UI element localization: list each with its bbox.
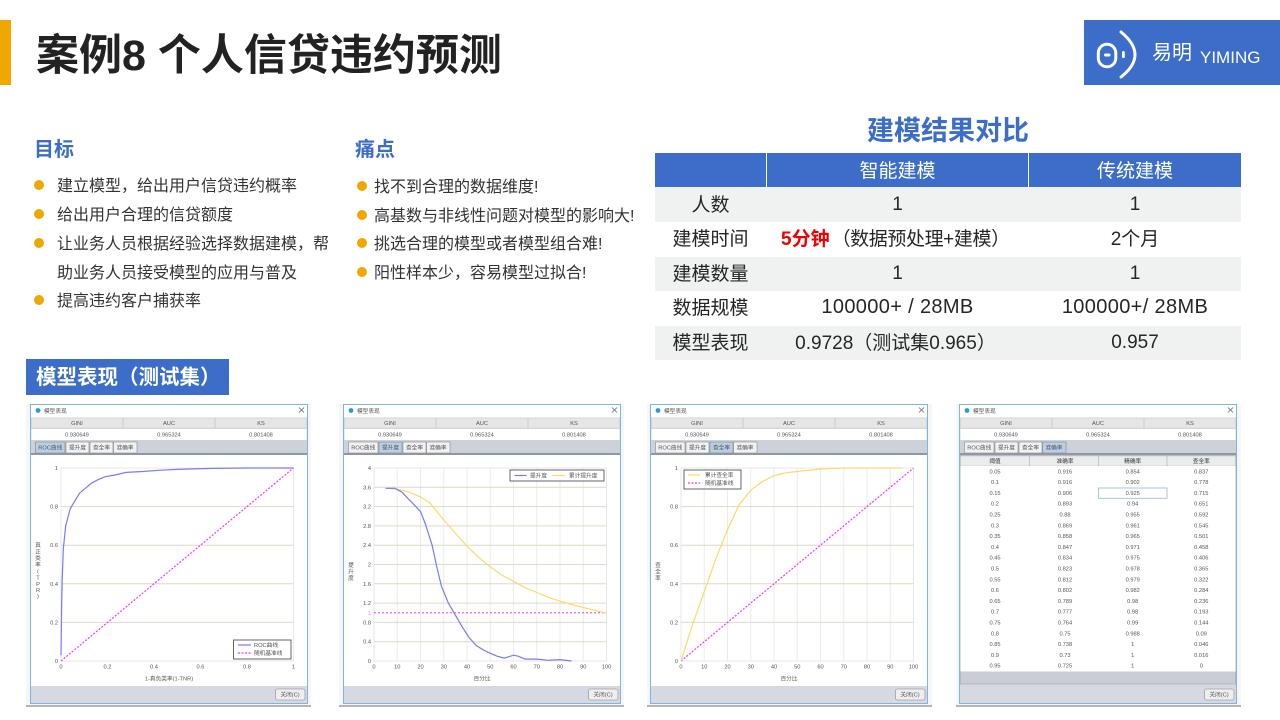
table window: threshold metrics: 0.5 bbox=[991, 566, 999, 572]
table window: threshold metrics: 0 bbox=[1200, 664, 1203, 670]
chart window: recall curve: 30 bbox=[748, 664, 754, 670]
chart window: lift curve: 4 bbox=[368, 466, 371, 472]
table window: threshold metrics: 0.906 bbox=[1058, 491, 1072, 497]
table window: threshold metrics: 0.501 bbox=[1194, 534, 1209, 540]
chart window: lift curve: 60 bbox=[510, 664, 516, 670]
table window: threshold metrics: 0.965324 bbox=[1086, 432, 1110, 438]
row: 建模时间: 2个月 bbox=[1111, 229, 1159, 250]
table window: threshold metrics: 0.802 bbox=[1058, 588, 1072, 594]
table window: threshold metrics: GINI bbox=[1000, 421, 1013, 427]
row: 数据规模: 100000+ / 28MB bbox=[821, 296, 974, 318]
table window: threshold metrics: 0.925 bbox=[1126, 491, 1140, 497]
chart window: recall curve: 0.965324 bbox=[777, 432, 801, 438]
section label: 模型表现（测试集）: 模型表现（测试集） bbox=[36, 366, 220, 389]
bullet 2: 高基数与非线性问题对模型的影响大! bbox=[374, 208, 634, 225]
table window: threshold metrics: 1 bbox=[1131, 653, 1135, 659]
table window: threshold metrics: 0.812 bbox=[1058, 577, 1072, 583]
chart window: lift curve: 0 bbox=[372, 664, 375, 670]
table window: threshold metrics: 关闭(C) bbox=[1210, 690, 1229, 698]
table window: threshold metrics: 0.823 bbox=[1058, 566, 1072, 572]
chart window: ROC curve: ( bbox=[37, 569, 39, 575]
chart window: ROC curve: 1-真负类率(1-TNR) bbox=[144, 674, 193, 682]
row: 数据规模: 100000+/ 28MB bbox=[1062, 296, 1208, 318]
row: 人数: 人数 bbox=[691, 195, 730, 216]
chart window: recall curve: 全 bbox=[655, 568, 661, 576]
row: 数据规模 bbox=[672, 296, 1208, 319]
chart window: lift curve: 0.965324 bbox=[470, 432, 494, 438]
bullet 1: 建立模型，给出用户信贷违约概率 bbox=[57, 178, 297, 195]
panel: 目标 bbox=[34, 138, 329, 310]
chart window: recall curve: 50 bbox=[794, 664, 801, 670]
row: 人数: 1 bbox=[892, 194, 903, 214]
table window: threshold metrics: 0.854 bbox=[1126, 469, 1140, 475]
row: 模型表现: 0.9728（测试集0.965） bbox=[795, 332, 996, 354]
chart window: ROC curve: 0.4 bbox=[150, 664, 157, 670]
table window: threshold metrics: 0.916 bbox=[1058, 480, 1072, 486]
chart window: ROC curve: 0.6 bbox=[50, 543, 58, 549]
table window: threshold metrics: 0.09 bbox=[1196, 631, 1207, 637]
table window: threshold metrics: 0.193 bbox=[1194, 610, 1209, 616]
table window: threshold metrics: 0.94 bbox=[1127, 502, 1139, 508]
comparison table bbox=[655, 153, 1241, 360]
table window: threshold metrics: 0.45 bbox=[990, 556, 1001, 562]
chart window: recall curve: 百分比 bbox=[781, 674, 798, 682]
chart window: recall curve: 随机基准线 bbox=[705, 479, 734, 487]
chart window: ROC curve: 0.2 bbox=[50, 620, 58, 626]
table window: threshold metrics: 0.55 bbox=[990, 577, 1001, 583]
chart window: recall curve: 20 bbox=[725, 664, 731, 670]
chart window: ROC curve: T bbox=[36, 576, 40, 582]
row: 数据规模: 数据规模 bbox=[672, 298, 748, 319]
chart window: ROC curve: 关闭(C) bbox=[280, 690, 299, 698]
row: 建模数量: 1 bbox=[1130, 263, 1140, 284]
chart window: ROC curve: 准确率 bbox=[116, 444, 133, 452]
chart window: lift curve: 2.4 bbox=[363, 543, 371, 549]
table window: threshold metrics: 0.35 bbox=[990, 534, 1001, 540]
chart window: ROC curve: KS bbox=[257, 421, 264, 427]
accent bar bbox=[0, 20, 11, 85]
chart window: ROC curve: ROC曲线 bbox=[254, 641, 278, 649]
chart window: lift curve: 模型表现 bbox=[357, 407, 380, 415]
chart window: ROC curve: 0.965324 bbox=[157, 432, 180, 438]
chart window: lift curve: 70 bbox=[533, 664, 540, 670]
logo: YIMING: YIMING bbox=[1200, 48, 1260, 67]
chart window: recall curve: 0.8 bbox=[670, 505, 678, 511]
chart window: lift curve: KS bbox=[570, 421, 578, 427]
table window: threshold metrics: 提升度 bbox=[998, 444, 1016, 452]
screenshot backing 2 bbox=[339, 404, 624, 707]
table window: threshold metrics: 0.592 bbox=[1194, 512, 1209, 518]
table header: 传统建模 bbox=[1097, 160, 1173, 182]
table window: threshold metrics: 0.1 bbox=[991, 480, 999, 486]
table window: threshold metrics: 0.738 bbox=[1058, 642, 1072, 648]
table window: threshold metrics: 阈值 bbox=[990, 457, 1001, 465]
chart window: ROC curve: 1 bbox=[291, 664, 295, 670]
table window: threshold metrics: 0.725 bbox=[1058, 664, 1072, 670]
row: 建模时间: 建模时间 bbox=[672, 229, 748, 250]
table window: threshold metrics: 查全率 bbox=[1193, 457, 1210, 465]
heading: 痛点: 痛点 bbox=[355, 139, 395, 161]
table window: threshold metrics: KS bbox=[1186, 421, 1194, 427]
chart window: ROC curve: 0.2 bbox=[103, 664, 111, 670]
chart window: recall curve: 0.2 bbox=[670, 620, 678, 626]
chart window: recall curve: KS bbox=[878, 421, 885, 427]
chart window: ROC curve: R bbox=[35, 588, 40, 594]
chart window: recall curve: AUC bbox=[783, 421, 795, 427]
table window: threshold metrics: 0.2 bbox=[991, 502, 999, 508]
chart window: lift curve: 1 bbox=[368, 611, 371, 617]
row: 人数 bbox=[655, 187, 1241, 222]
title: 案例8 个人信贷违约预测 bbox=[36, 32, 502, 80]
table window: threshold metrics: 0.236 bbox=[1194, 599, 1209, 605]
table window: threshold metrics: 准确率 bbox=[1057, 457, 1074, 465]
table window: threshold metrics: 0.715 bbox=[1194, 491, 1209, 497]
chart window: ROC curve: 0.801408 bbox=[249, 432, 272, 438]
chart window: lift curve: 百分比 bbox=[473, 674, 491, 682]
table window: threshold metrics: AUC bbox=[1092, 421, 1104, 427]
chart window: ROC curve: ) bbox=[37, 594, 39, 600]
chart window: ROC curve: 0.8 bbox=[50, 505, 58, 511]
table window: threshold metrics: ROC曲线 bbox=[968, 444, 992, 452]
chart window: ROC curve: 1 bbox=[54, 466, 58, 472]
table window: threshold metrics: 0.902 bbox=[1126, 480, 1140, 486]
table window: threshold metrics: 0.978 bbox=[1126, 566, 1140, 572]
chart window: recall curve bbox=[650, 404, 928, 704]
screenshot backing 1 bbox=[26, 404, 311, 707]
bullet 3 bbox=[34, 235, 329, 282]
table window: threshold metrics: 0.971 bbox=[1126, 545, 1140, 551]
table window: threshold metrics: 0.73 bbox=[1060, 653, 1071, 659]
table window: threshold metrics: 0.85 bbox=[990, 642, 1001, 648]
chart window: recall curve: 提升度 bbox=[689, 444, 707, 452]
table window: threshold metrics: 0.789 bbox=[1058, 599, 1072, 605]
chart window: recall curve: 0 bbox=[675, 659, 678, 665]
table window: threshold metrics: 0.6 bbox=[991, 588, 999, 594]
chart window: ROC curve: 0.930649 bbox=[65, 432, 88, 438]
row: 建模时间: （数据预处理+建模） bbox=[832, 229, 1010, 250]
chart window: ROC curve: 模型表现 bbox=[44, 407, 67, 415]
chart window: ROC curve: 0.6 bbox=[196, 664, 204, 670]
bullet 4: 阳性样本少，容易模型过拟合! bbox=[374, 265, 586, 282]
chart window: lift curve: 0.8 bbox=[363, 620, 371, 626]
table window: threshold metrics: 0.869 bbox=[1058, 523, 1072, 529]
table window: threshold metrics: 0.95 bbox=[990, 664, 1001, 670]
table window: threshold metrics: 0.930649 bbox=[994, 432, 1018, 438]
table window: threshold metrics: 0.75 bbox=[990, 620, 1001, 626]
chart window: recall curve: 模型表现 bbox=[664, 407, 687, 415]
table window: threshold metrics: 0.979 bbox=[1126, 577, 1140, 583]
table window: threshold metrics: 0.25 bbox=[990, 512, 1001, 518]
table window: threshold metrics: 0.284 bbox=[1194, 588, 1209, 594]
table window: threshold metrics: 1 bbox=[1131, 664, 1135, 670]
table window: threshold metrics: 模型表现 bbox=[973, 407, 996, 415]
row: 模型表现: 模型表现 bbox=[672, 332, 748, 354]
chart window: ROC curve: 查全率 bbox=[92, 444, 110, 452]
table window: threshold metrics: 0.322 bbox=[1194, 577, 1209, 583]
chart window: recall curve: 10 bbox=[701, 664, 708, 670]
chart window: recall curve: 查 bbox=[655, 561, 661, 569]
chart window: ROC curve: 率 bbox=[35, 560, 41, 568]
chart window: recall curve: 0 bbox=[680, 664, 683, 670]
table header: 智能建模 bbox=[859, 160, 936, 182]
bullet 3: 助业务人员接受模型的应用与普及 bbox=[57, 265, 297, 282]
chart window: recall curve: 0.4 bbox=[670, 582, 678, 588]
table window: threshold metrics: 0.801408 bbox=[1178, 432, 1202, 438]
section label: 模型表现（测试集） bbox=[26, 359, 229, 395]
chart window: lift curve: 30 bbox=[440, 664, 447, 670]
table window: threshold metrics: 0.99 bbox=[1127, 620, 1139, 626]
chart window: lift curve: 3.2 bbox=[363, 505, 371, 511]
chart window: lift curve: 1.2 bbox=[363, 601, 371, 607]
chart window: lift curve: 查全率 bbox=[406, 444, 423, 452]
chart window: lift curve: 40 bbox=[464, 664, 470, 670]
chart window: recall curve: 40 bbox=[771, 664, 777, 670]
table window: threshold metrics: 0.98 bbox=[1127, 599, 1139, 605]
bullet 3: 让业务人员根据经验选择数据建模，帮 bbox=[57, 236, 329, 253]
chart window: lift curve: 100 bbox=[601, 664, 611, 670]
table window: threshold metrics: 0.15 bbox=[990, 491, 1001, 497]
chart window: lift curve: 关闭(C) bbox=[593, 690, 612, 698]
table window: threshold metrics: 0.858 bbox=[1058, 534, 1072, 540]
table window: threshold metrics: 0.778 bbox=[1194, 480, 1209, 486]
table window: threshold metrics: 0.365 bbox=[1194, 566, 1209, 572]
table window: threshold metrics: 准确率 bbox=[1046, 444, 1063, 452]
chart window: recall curve: 率 bbox=[655, 574, 661, 582]
chart window: lift curve: 3.6 bbox=[363, 485, 371, 491]
chart window: recall curve: 60 bbox=[818, 664, 824, 670]
table window: threshold metrics: 精确率 bbox=[1124, 457, 1142, 465]
table window: threshold metrics: 0.955 bbox=[1126, 512, 1140, 518]
table window: threshold metrics: 0.764 bbox=[1058, 620, 1072, 626]
chart window: ROC curve: 0.8 bbox=[243, 664, 250, 670]
row: 模型表现: 0.957 bbox=[1111, 332, 1159, 353]
table window: threshold metrics: 0.834 bbox=[1058, 556, 1072, 562]
row: 建模时间: 5分钟 bbox=[781, 229, 830, 250]
chart window: ROC curve: 0 bbox=[59, 664, 62, 670]
panel: 痛点 bbox=[355, 138, 634, 282]
chart window: ROC curve: AUC bbox=[162, 421, 175, 427]
chart window: lift curve: 度 bbox=[348, 574, 354, 582]
chart window: recall curve: 0.930649 bbox=[685, 432, 709, 438]
table window: threshold metrics: 0.458 bbox=[1194, 545, 1209, 551]
chart window: ROC curve: 0 bbox=[54, 659, 58, 665]
table window: threshold metrics: 0.893 bbox=[1058, 502, 1072, 508]
chart window: lift curve: 0.930649 bbox=[378, 432, 402, 438]
chart window: recall curve: 100 bbox=[909, 664, 919, 670]
chart window: lift curve: 90 bbox=[580, 664, 586, 670]
chart window: ROC curve: 0.4 bbox=[50, 582, 58, 588]
chart window: lift curve: 10 bbox=[394, 664, 400, 670]
table window: threshold metrics: 0.8 bbox=[991, 631, 999, 637]
chart window: ROC curve: 提升度 bbox=[68, 444, 86, 452]
logo: YIMING: 易明 bbox=[1152, 42, 1192, 64]
chart window: lift curve: 20 bbox=[417, 664, 423, 670]
heading: 建模结果对比: 建模结果对比 bbox=[867, 116, 1029, 146]
table window: threshold metrics: 0.961 bbox=[1126, 523, 1140, 529]
chart window: lift curve: 提升度 bbox=[530, 472, 547, 480]
table window: threshold metrics: 0.916 bbox=[1058, 469, 1072, 475]
chart window: recall curve: 准确率 bbox=[737, 444, 754, 452]
logo: YIMING bbox=[1084, 20, 1280, 85]
bullet 2: 给出用户合理的信贷额度 bbox=[57, 207, 233, 224]
table window: threshold metrics: 0.975 bbox=[1126, 556, 1140, 562]
row: 建模数量: 1 bbox=[892, 263, 903, 284]
chart window: recall curve: 关闭(C) bbox=[901, 690, 920, 698]
chart window: ROC curve: GINI bbox=[71, 421, 83, 427]
chart window: ROC curve: 真 bbox=[35, 541, 41, 549]
table window: threshold metrics: 0.98 bbox=[1127, 610, 1139, 616]
table window: threshold metrics: 查全率 bbox=[1022, 444, 1040, 452]
chart window: lift curve: 升 bbox=[348, 568, 354, 576]
row: 建模时间 bbox=[672, 228, 1159, 250]
table window: threshold metrics: 0.016 bbox=[1194, 653, 1209, 659]
chart window: recall curve: GINI bbox=[691, 421, 704, 427]
row: 建模数量 bbox=[655, 257, 1241, 291]
chart window: lift curve: 1.6 bbox=[363, 582, 371, 588]
chart window: recall curve: 0.6 bbox=[670, 543, 678, 549]
chart window: ROC curve: P bbox=[36, 582, 40, 588]
chart window: lift curve: 50 bbox=[487, 664, 493, 670]
bullet 3: 挑选合理的模型或者模型组合难! bbox=[374, 236, 602, 253]
table window: threshold metrics: 0.75 bbox=[1060, 631, 1071, 637]
table window: threshold metrics: 0.837 bbox=[1194, 469, 1209, 475]
chart window: lift curve: ROC曲线 bbox=[351, 444, 375, 452]
chart window: lift curve: 0.801408 bbox=[562, 432, 586, 438]
chart window: recall curve: 70 bbox=[841, 664, 847, 670]
table window: threshold metrics: 1 bbox=[1131, 642, 1135, 648]
chart window: lift curve: 提升度 bbox=[382, 444, 399, 452]
chart window: ROC curve: 正 bbox=[35, 548, 41, 556]
chart window: ROC curve: ROC曲线 bbox=[38, 444, 62, 452]
row: 人数: 1 bbox=[1130, 194, 1140, 214]
chart window: recall curve: 90 bbox=[887, 664, 894, 670]
table window: threshold metrics: 0.965 bbox=[1126, 534, 1140, 540]
chart window: recall curve: 80 bbox=[864, 664, 870, 670]
chart window: ROC curve: 随机基准线 bbox=[254, 649, 282, 657]
chart window: lift curve: 提 bbox=[348, 561, 354, 569]
table window: threshold metrics bbox=[959, 404, 1237, 704]
chart window: ROC curve: 类 bbox=[35, 554, 41, 562]
table window: threshold metrics: 0.144 bbox=[1194, 620, 1209, 626]
table window: threshold metrics: 0.545 bbox=[1194, 523, 1209, 529]
chart window: lift curve: 80 bbox=[557, 664, 563, 670]
table header bbox=[655, 153, 1241, 187]
bullet 4: 提高违约客户捕获率 bbox=[57, 293, 201, 310]
table window: threshold metrics: 0.88 bbox=[1060, 512, 1071, 518]
table window: threshold metrics: 0.988 bbox=[1126, 631, 1140, 637]
row: 模型表现 bbox=[655, 326, 1241, 360]
chart window: lift curve: 2 bbox=[368, 562, 371, 568]
chart window: ROC curve bbox=[30, 404, 308, 704]
table window: threshold metrics: 0.3 bbox=[991, 523, 999, 529]
chart window: lift curve: 准确率 bbox=[429, 444, 447, 452]
table window: threshold metrics: 0.406 bbox=[1194, 556, 1209, 562]
table window: threshold metrics: 0.982 bbox=[1126, 588, 1140, 594]
table window: threshold metrics: 0.847 bbox=[1058, 545, 1072, 551]
screenshot backing 3 bbox=[647, 404, 932, 707]
bullet 1: 找不到合理的数据维度! bbox=[374, 179, 538, 196]
screenshot backing 4 bbox=[956, 404, 1241, 707]
table window: threshold metrics: 0.651 bbox=[1194, 502, 1209, 508]
table window: threshold metrics: 0.9 bbox=[991, 653, 999, 659]
table window: threshold metrics: 0.777 bbox=[1058, 610, 1072, 616]
table window: threshold metrics: 0.4 bbox=[991, 545, 999, 551]
chart window: lift curve bbox=[343, 404, 621, 704]
chart window: lift curve: 2.8 bbox=[363, 524, 371, 530]
heading: 目标: 目标 bbox=[34, 139, 74, 161]
chart window: lift curve: 0 bbox=[368, 659, 371, 665]
table window: threshold metrics: 0.046 bbox=[1194, 642, 1209, 648]
chart window: recall curve: 0.801408 bbox=[869, 432, 893, 438]
chart window: recall curve: ROC曲线 bbox=[659, 444, 683, 452]
chart window: lift curve: GINI bbox=[384, 421, 396, 427]
chart window: lift curve: AUC bbox=[476, 421, 488, 427]
chart window: recall curve: 查全率 bbox=[713, 444, 731, 452]
chart window: lift curve: 累计提升度 bbox=[569, 472, 597, 480]
table window: threshold metrics: 0.7 bbox=[991, 610, 999, 616]
row: 建模数量: 建模数量 bbox=[672, 264, 748, 284]
table window: threshold metrics: 0.65 bbox=[990, 599, 1001, 605]
table window: threshold metrics: 0.05 bbox=[990, 469, 1001, 475]
chart window: recall curve: 累计查全率 bbox=[705, 471, 734, 479]
chart window: lift curve: 0.4 bbox=[363, 640, 371, 646]
chart window: recall curve: 1 bbox=[675, 466, 678, 472]
